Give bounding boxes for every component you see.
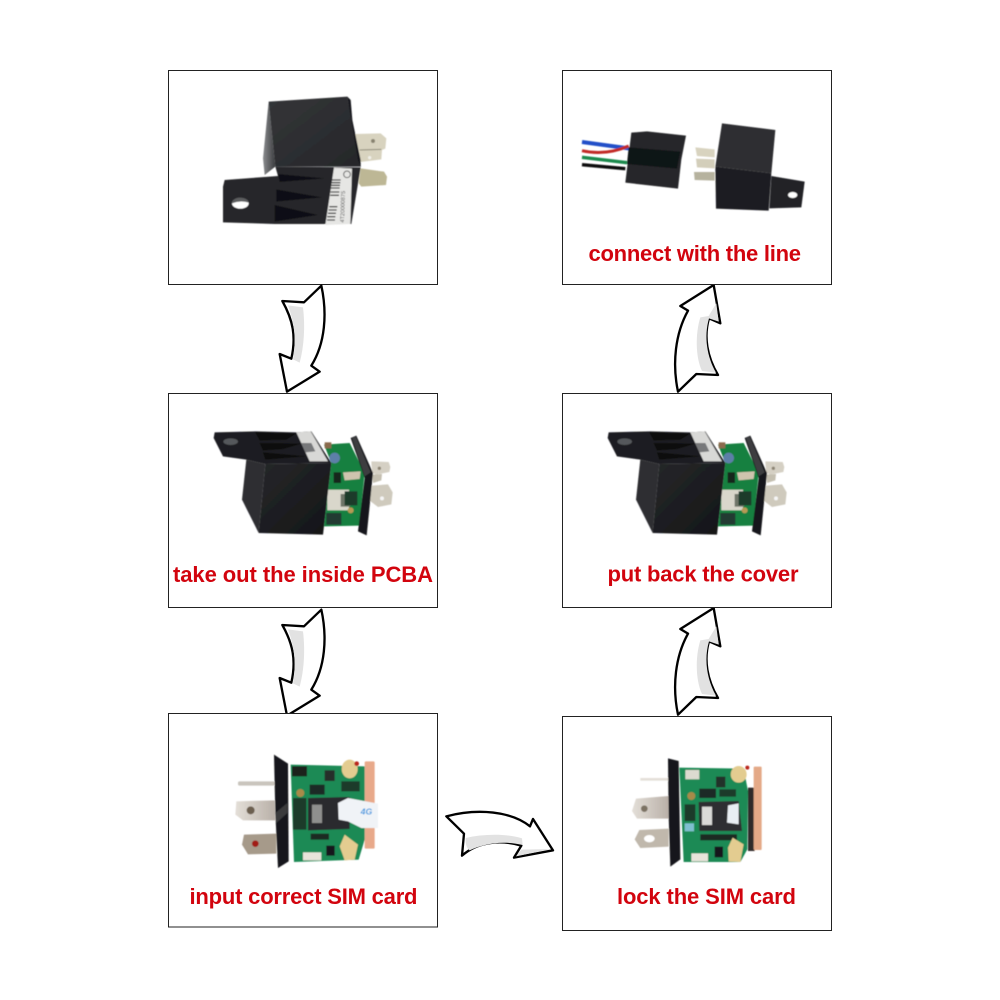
arrow: step 1 to step 2 — [280, 286, 325, 392]
photo: relay and wiring socket — [582, 123, 805, 211]
panel: step 2 take out PCBA — [168, 394, 438, 608]
arrow: step 2 to step 3 — [280, 610, 325, 716]
caption: connect with the line: connect with the line — [588, 241, 801, 266]
photo: relay with cover being replaced — [608, 431, 787, 535]
photo: sealed relay: 4T20000875 — [340, 191, 347, 223]
photo: PCBA with SIM card being inserted — [235, 755, 378, 868]
photo: sealed relay — [223, 97, 387, 225]
arrow: step 4 to step 5 — [675, 608, 720, 715]
panel: step 4 lock SIM card — [562, 716, 832, 930]
arrow: step 5 to step 6 — [675, 285, 720, 392]
panel: step 5 put back cover — [562, 394, 832, 608]
caption: put back the cover: put back the cover — [608, 562, 799, 586]
caption: take out the inside PCBA: take out the inside PCBA — [173, 562, 433, 587]
caption: lock the SIM card: lock the SIM card — [617, 884, 796, 909]
arrow: step 3 to step 4 — [446, 812, 553, 858]
photo: PCBA with SIM card being inserted: 4G — [360, 807, 372, 817]
caption: input correct SIM card: input correct SIM card — [190, 884, 418, 909]
panel: step 1 relay — [168, 70, 438, 284]
panel: step 3 input SIM card — [168, 714, 438, 927]
photo: relay with PCBA pulled out — [214, 431, 393, 535]
panel: step 6 connect with the line — [562, 70, 832, 284]
photo: PCBA with SIM card locked — [632, 758, 762, 867]
